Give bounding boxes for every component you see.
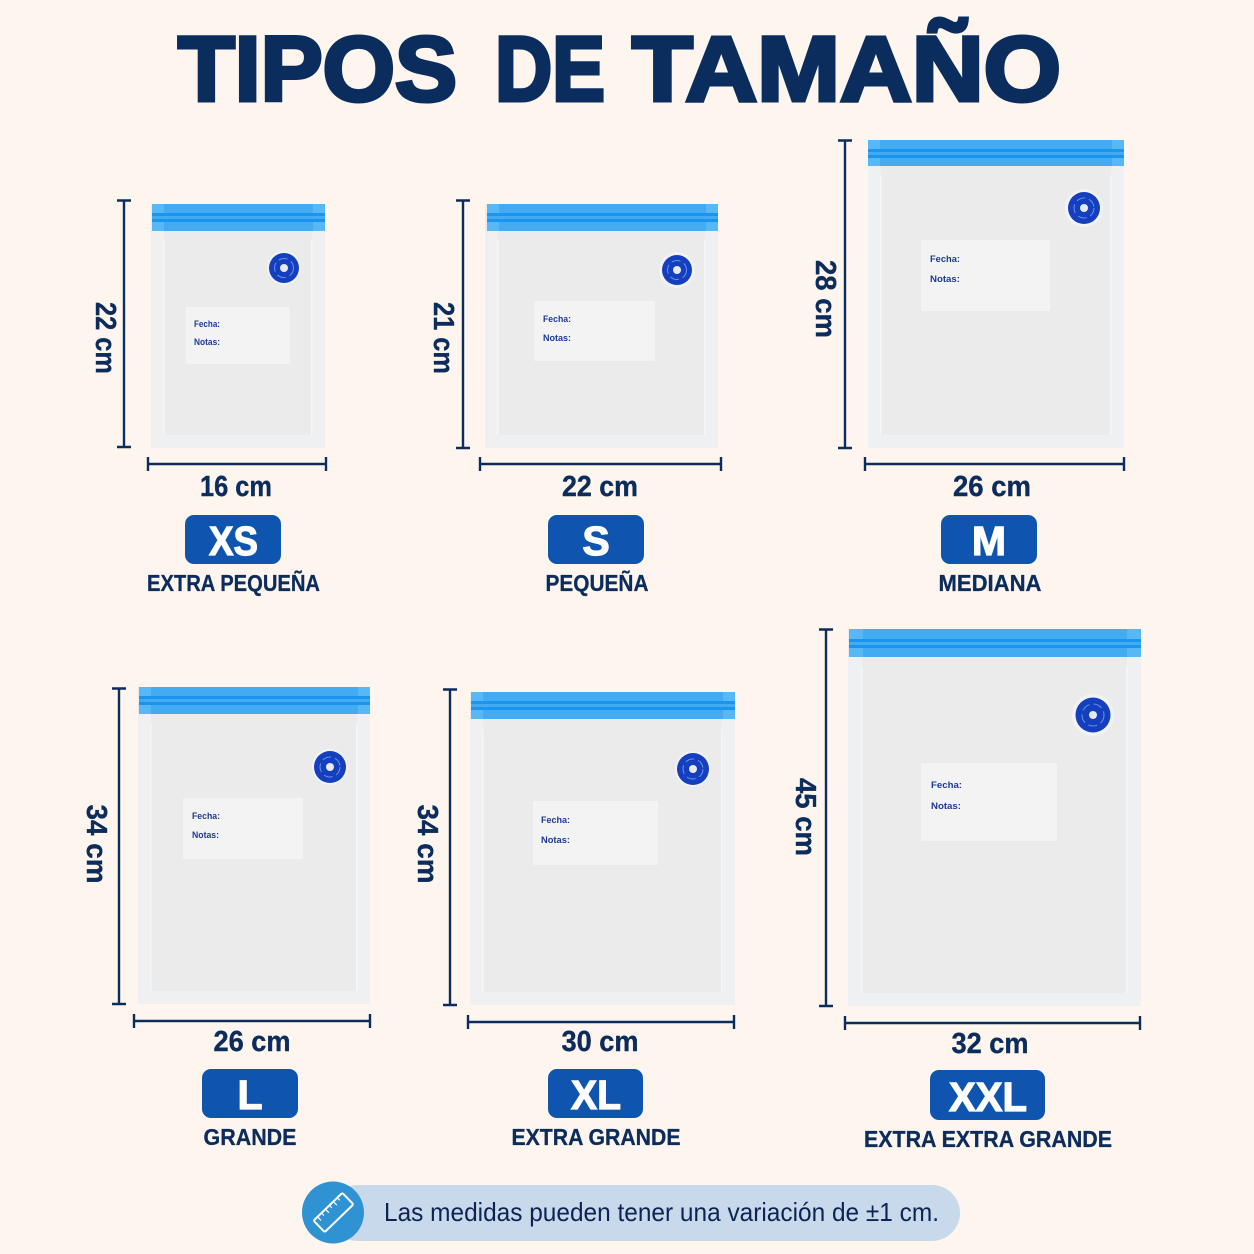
height label M: 28 cm — [809, 260, 841, 338]
bag XL — [470, 692, 735, 1005]
bag XL: Notas: — [541, 835, 570, 846]
width label XL: 30 cm — [562, 1026, 638, 1058]
size badge M: M — [972, 518, 1006, 564]
size name L: GRANDE — [204, 1124, 296, 1150]
size badge S — [548, 515, 644, 564]
size name XS: EXTRA PEQUEÑA — [147, 569, 320, 596]
height dimension M — [838, 140, 852, 448]
width label XXL: 32 cm — [952, 1028, 1028, 1060]
width label XS: 16 cm — [200, 471, 272, 503]
size badge XS: XS — [209, 518, 258, 564]
bag L — [138, 687, 370, 1004]
size badge XL: XL — [571, 1072, 621, 1118]
bag XL: Fecha: — [541, 815, 570, 826]
size name XL: EXTRA GRANDE — [512, 1124, 680, 1150]
width dimension XL — [468, 1015, 734, 1029]
panel: M — [809, 140, 1124, 596]
height dimension XL — [443, 690, 457, 1005]
bag M: Fecha: — [930, 254, 960, 265]
height label XXL: 45 cm — [789, 778, 821, 856]
size badge L — [202, 1069, 298, 1118]
title: DE — [495, 18, 605, 120]
bag XXL: Notas: — [931, 801, 961, 812]
size badge XL — [548, 1069, 643, 1118]
width dimension M — [865, 457, 1124, 471]
icon: ruler — [302, 1182, 364, 1244]
size badge XS — [185, 515, 281, 564]
size name M: MEDIANA — [938, 570, 1042, 596]
bag XXL — [848, 629, 1141, 1006]
bag XS: Fecha: — [194, 319, 220, 330]
width dimension S — [480, 457, 721, 471]
size name XXL: EXTRA EXTRA GRANDE — [864, 1126, 1112, 1152]
bag S: Notas: — [543, 333, 571, 344]
width label L: 26 cm — [214, 1026, 290, 1058]
size badge XXL — [930, 1070, 1045, 1120]
bag S — [485, 204, 718, 448]
note text: Las medidas pueden tener una variación de ±1 cm. — [384, 1197, 939, 1227]
size badge XXL: XXL — [949, 1074, 1027, 1120]
title: TAMAÑO — [632, 18, 1061, 120]
bag L: Fecha: — [192, 811, 220, 822]
height dimension S — [456, 200, 470, 448]
height label L: 34 cm — [80, 804, 112, 884]
size badge S: S — [582, 518, 610, 564]
width dimension XXL — [845, 1016, 1140, 1030]
height label XL: 34 cm — [411, 804, 443, 884]
panel: S — [427, 200, 721, 596]
width label S: 22 cm — [562, 471, 638, 503]
height dimension XS — [117, 200, 131, 447]
bag L: Notas: — [192, 830, 219, 841]
panel: XL — [411, 690, 735, 1150]
size badge M — [941, 515, 1037, 564]
height dimension XXL — [819, 630, 833, 1006]
bag S: Fecha: — [543, 314, 571, 325]
title — [178, 18, 1061, 120]
width label M: 26 cm — [953, 471, 1031, 503]
bag M — [868, 140, 1124, 448]
width dimension L — [134, 1014, 370, 1028]
size name S: PEQUEÑA — [546, 569, 648, 596]
bag XXL: Fecha: — [931, 780, 962, 791]
panel: XS — [89, 200, 326, 596]
title: TIPOS — [178, 18, 457, 120]
width dimension XS — [148, 457, 326, 471]
height label S: 21 cm — [427, 302, 459, 374]
bag XS: Notas: — [194, 337, 220, 348]
panel: L — [80, 687, 370, 1150]
height dimension L — [112, 688, 126, 1004]
callout: measurement note — [302, 1182, 960, 1244]
height label XS: 22 cm — [89, 302, 121, 374]
panel: XXL — [789, 629, 1141, 1152]
bag M: Notas: — [930, 274, 960, 285]
bag XS — [151, 204, 325, 448]
size badge L: L — [237, 1072, 263, 1118]
